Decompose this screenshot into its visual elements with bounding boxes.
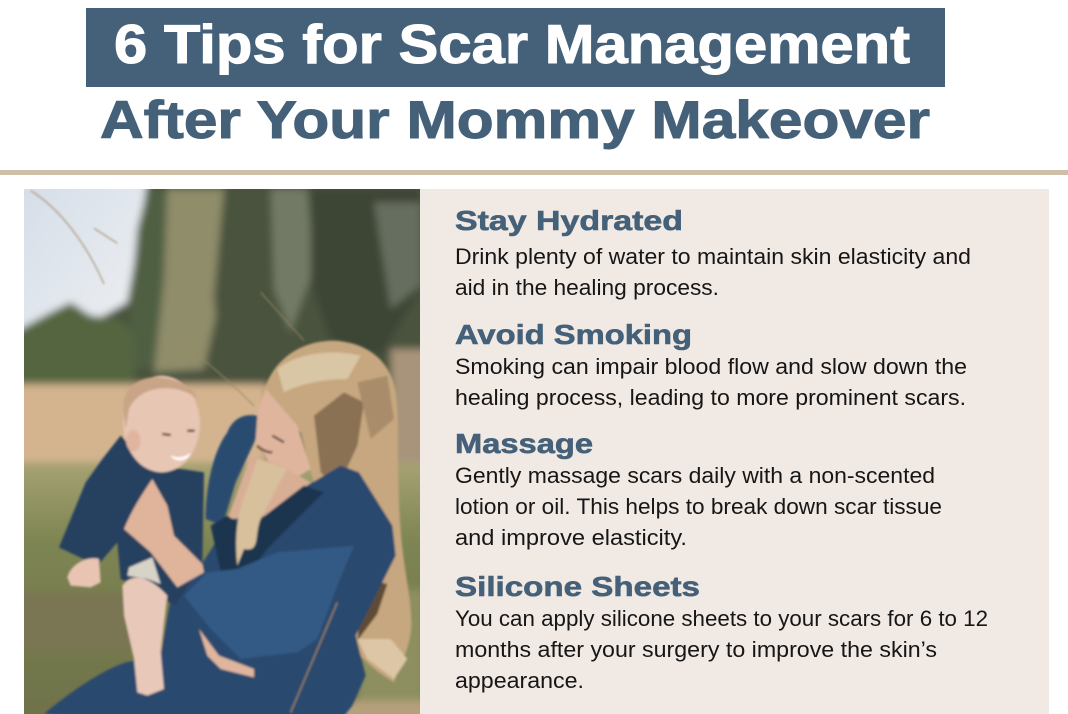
text: avoid smoking: healing process, leading to more prominent scars. [455,385,966,410]
text: silicone sheets: appearance. [455,668,584,693]
text: stay hydrated: Drink plenty of water to maintain skin elasticity and [455,244,971,269]
baby's standing leg [122,578,167,696]
mother's face [250,389,311,479]
baby's hand [67,558,101,587]
baby's second leg [199,629,254,677]
baby's head [123,376,200,472]
divider rule [0,170,1068,175]
title banner [86,8,945,87]
heading: massage: Massage [455,428,593,459]
text: massage: lotion or oil. This helps to break down scar tissue [455,494,942,519]
baby's jacket [59,436,204,606]
chest [227,456,311,519]
text: stay hydrated: aid in the healing process. [455,275,719,300]
hair strands on chest [236,459,287,566]
stem [291,602,337,712]
text: massage [455,463,942,550]
heading: avoid smoking: Avoid Smoking [455,319,692,350]
mother's dress [44,466,396,714]
text: avoid smoking [455,354,967,410]
text: silicone sheets: You can apply silicone sheets to your scars for 6 to 12 [455,606,988,631]
grass stems [31,191,304,406]
mother's hair back [261,341,411,682]
text: avoid smoking: Smoking can impair blood flow and slow down the [455,354,967,379]
diaper [127,557,161,584]
text: stay hydrated [455,244,971,300]
text: silicone sheets [455,606,988,693]
title line 1: 6 Tips for Scar Management [114,13,910,75]
text: silicone sheets: months after your surgery to improve the skin’s [455,637,937,662]
text: massage: Gently massage scars daily with a non-scented [455,463,935,488]
heading: silicone sheets: Silicone Sheets [455,571,700,602]
photo: mother holding baby in a field [24,189,420,714]
heading: stay hydrated: Stay Hydrated [455,205,683,236]
background [14,179,431,714]
mother's hand and arm [124,479,204,587]
foreground figures [31,191,411,714]
title line 2: After Your Mommy Makeover [100,91,930,150]
text: massage: and improve elasticity. [455,525,687,550]
panel: tips [420,189,1049,714]
